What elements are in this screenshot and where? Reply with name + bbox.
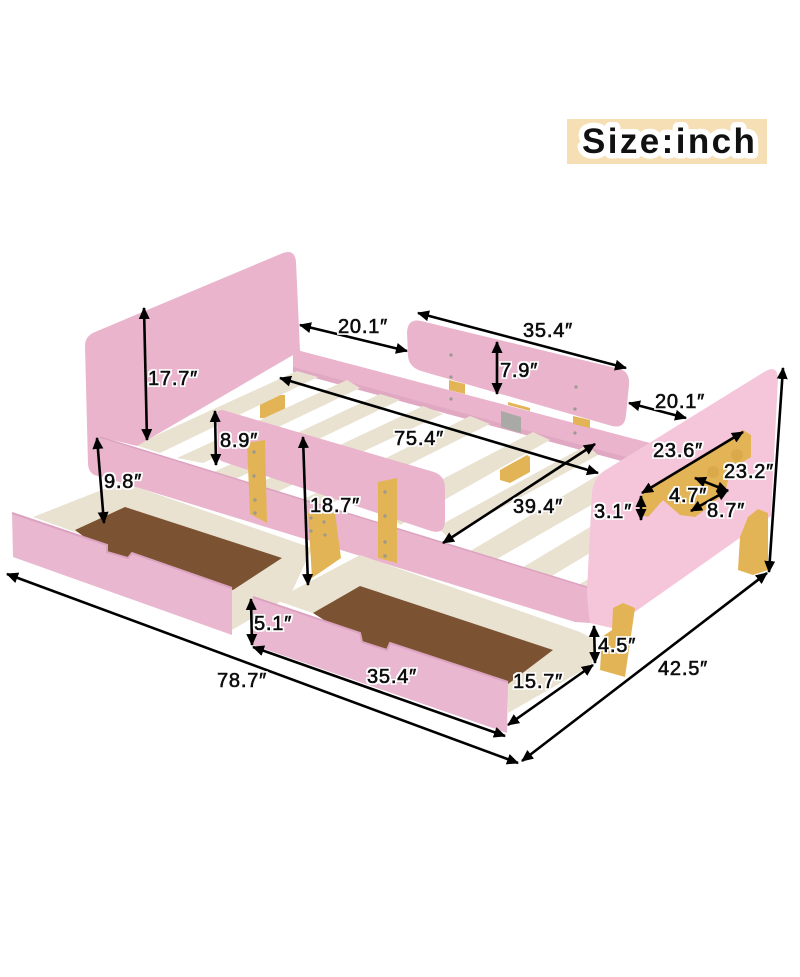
footboard wooden bracket — [642, 430, 751, 517]
dimension: bracket length 23.6: 23.6″ — [653, 440, 703, 462]
dimension: rear guard width 35.4 — [418, 313, 626, 368]
left headboard — [85, 252, 300, 476]
rear guard screws — [449, 353, 578, 435]
foot legs — [600, 509, 768, 677]
dimension: headboard height 17.7 — [144, 308, 198, 440]
dimension: under-bed clearance 4.5: 4.5″ — [598, 635, 636, 657]
dimension: bracket height 3.1 — [594, 496, 641, 523]
dimension: 8.7 — [691, 490, 745, 522]
right drawer — [253, 555, 595, 733]
dimension: 8.7: 8.7″ — [707, 500, 745, 522]
dimension: footboard height 23.2: 23.2″ — [724, 461, 774, 483]
dimension: 4.7 — [669, 478, 728, 507]
dimension: drawer depth 15.7 — [508, 665, 593, 725]
dimension: width 39.4: 39.4″ — [513, 496, 563, 518]
dimension: overall width 42.5: 42.5″ — [658, 658, 708, 680]
dimension: drawer length 35.4: 35.4″ — [367, 666, 417, 688]
dimension: length 75.4: 75.4″ — [394, 428, 444, 450]
dimension: post height 18.7 — [303, 437, 360, 585]
dimension: rear guard height 7.9: 7.9″ — [500, 360, 538, 382]
center front leg — [308, 513, 341, 578]
dimension: bracket length 23.6 — [642, 432, 743, 493]
dimension: overall width 42.5 — [522, 573, 767, 761]
size unit badge: Size:inch — [582, 122, 757, 161]
dimension: clearance 9.8: 9.8″ — [104, 471, 142, 493]
dimension: footboard height 23.2 — [724, 368, 783, 572]
front guard posts — [247, 440, 397, 563]
dimension: gap 20.1 right: 20.1″ — [655, 391, 705, 413]
rear latch plate — [501, 411, 521, 433]
left drawer — [12, 482, 312, 635]
dimension: clearance 9.8 — [97, 438, 142, 523]
dimension: drawer height 5.1: 5.1″ — [254, 613, 292, 635]
dimension: overall length 78.7 — [7, 574, 518, 763]
dimension: under-bed clearance 4.5 — [594, 626, 636, 663]
front guard panel — [217, 410, 445, 532]
dimension: width 39.4 — [443, 444, 595, 543]
rear guard panel — [407, 320, 629, 427]
rear guard posts — [449, 380, 590, 428]
dimension: length 75.4 — [280, 378, 598, 473]
dimension: overall length 78.7: 78.7″ — [217, 670, 267, 692]
back side rail — [293, 349, 650, 466]
dimension: rear guard height 7.9 — [497, 342, 538, 394]
dimension: gap 20.1 right — [629, 391, 705, 418]
dimension: gap 20.1 left: 20.1″ — [338, 316, 388, 338]
dimension: 4.7: 4.7″ — [669, 485, 707, 507]
dimension: post height 18.7: 18.7″ — [310, 495, 360, 517]
rear legs — [260, 395, 530, 483]
dimension: bracket height 3.1: 3.1″ — [594, 501, 632, 523]
dimension: drawer length 35.4 — [253, 647, 505, 736]
dimension: drawer height 5.1 — [251, 599, 292, 645]
dimension: rear guard width 35.4: 35.4″ — [523, 320, 573, 342]
dimension: drawer depth 15.7: 15.7″ — [513, 671, 563, 693]
dimension: headboard height 17.7: 17.7″ — [148, 368, 198, 390]
dimension: guard height 8.9: 8.9″ — [220, 430, 258, 452]
dimension: guard height 8.9 — [215, 411, 258, 465]
front side rail — [100, 437, 590, 623]
dimension: gap 20.1 left — [300, 316, 407, 351]
footboard — [587, 369, 778, 628]
bed slats — [135, 371, 600, 590]
